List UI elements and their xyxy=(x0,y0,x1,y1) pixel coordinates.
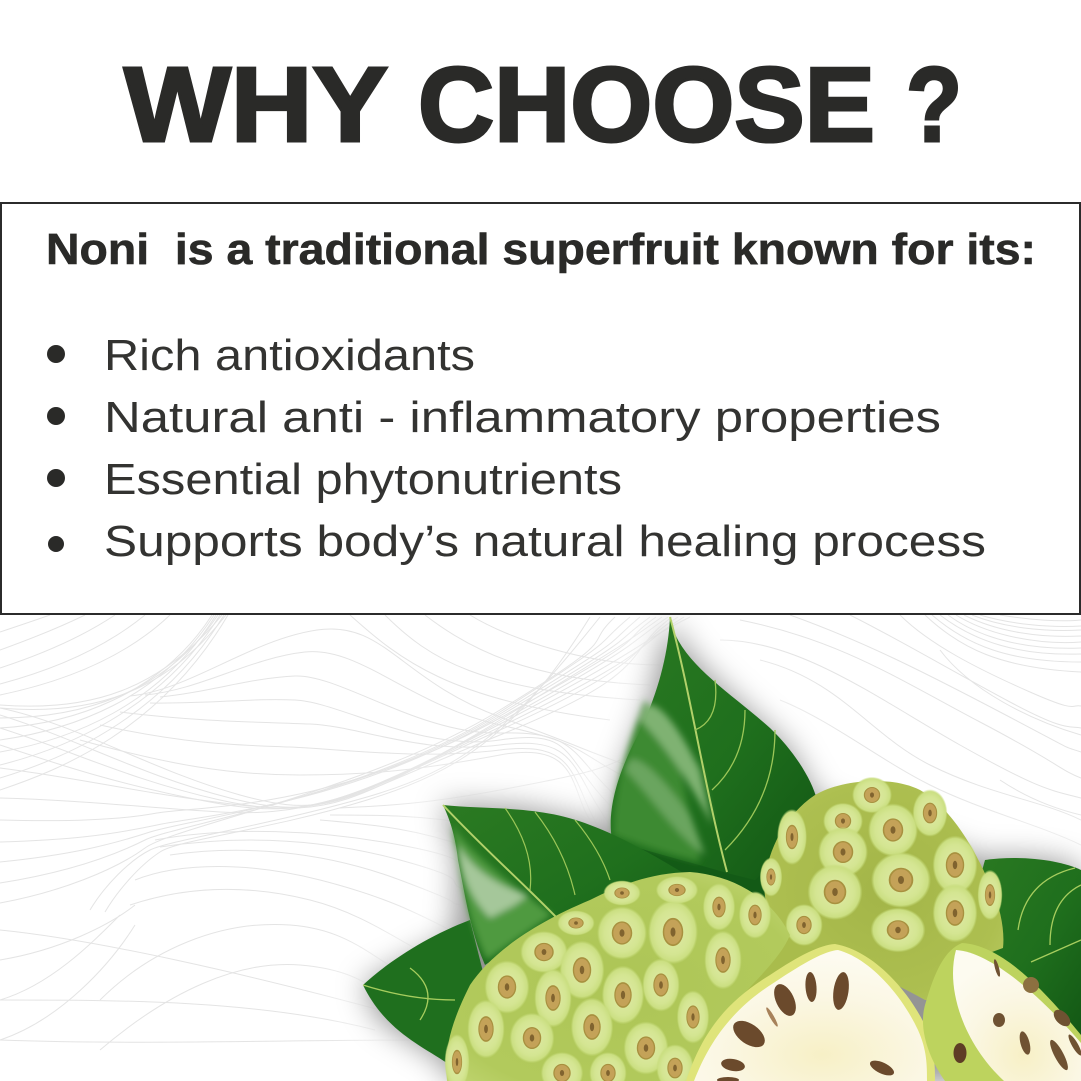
bullet 1: Rich antioxidants xyxy=(104,331,475,380)
benefits list xyxy=(47,331,986,566)
leaf shadow backing xyxy=(560,800,840,915)
white header area xyxy=(0,0,1081,202)
title: CHOOSE xyxy=(418,46,875,164)
leaf: left xyxy=(443,805,695,965)
leaf: right xyxy=(960,858,1081,1050)
fruit: halved noni centre xyxy=(686,944,935,1081)
title: WHY xyxy=(124,46,388,164)
fruit: halved noni right xyxy=(923,943,1081,1081)
title xyxy=(124,46,962,164)
fruit: upper whole noni xyxy=(740,777,1003,1000)
noni fruit and leaves illustration xyxy=(363,617,1081,1081)
title: ? xyxy=(906,46,962,164)
heading: Noni is a traditional superfruit known for its: xyxy=(46,225,1036,274)
leaf: lower left xyxy=(363,920,490,1063)
leaf: top xyxy=(611,617,817,880)
fruit soft halo and shadow xyxy=(363,617,1081,1081)
bullet 4: Supports body’s natural healing process xyxy=(104,517,986,566)
wavy line background pattern xyxy=(0,615,1081,1050)
bullet 3: Essential phytonutrients xyxy=(104,455,622,504)
panel: noni benefits xyxy=(1,203,1080,614)
bullet 2: Natural anti - inflammatory properties xyxy=(104,393,941,442)
fruit: large whole noni xyxy=(444,872,790,1081)
